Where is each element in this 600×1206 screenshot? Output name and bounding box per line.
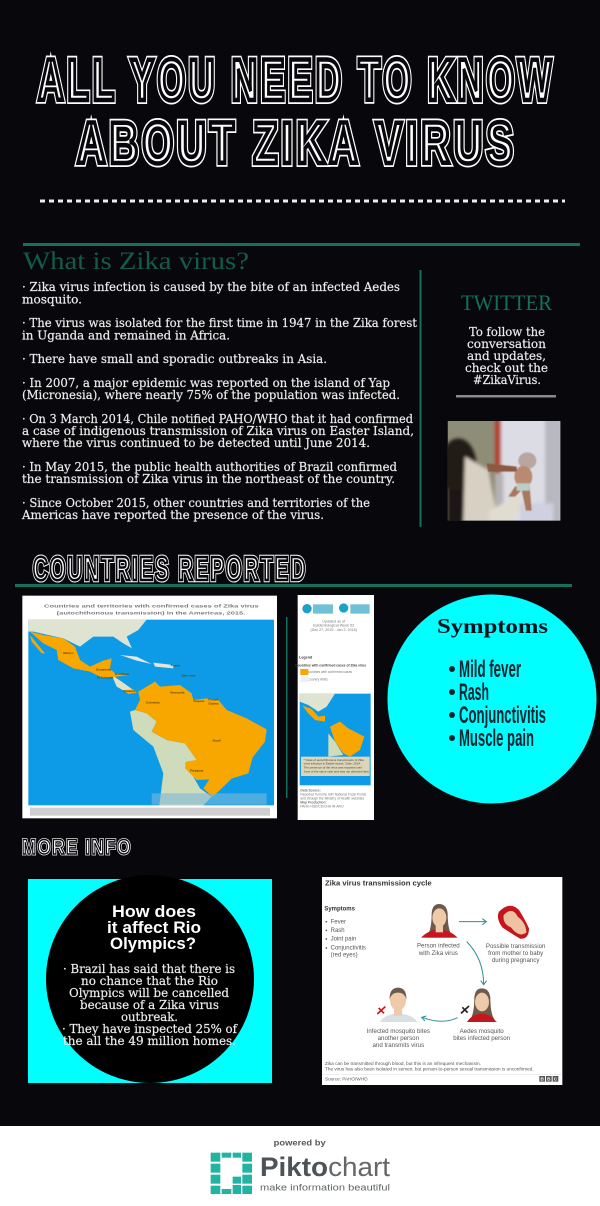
text block: what is Zika virus: where the virus continued to be detected until June 2014.: [22, 435, 370, 450]
diagram labels: during pregnancy: [492, 957, 540, 964]
diagram labels: bites infected person: [453, 1035, 511, 1042]
rio heading: [107, 902, 201, 953]
map labels: Guatemala: [96, 668, 112, 672]
map labels: Guyana: [193, 699, 205, 703]
rio text: Olympics will be cancelled: [69, 985, 229, 1000]
rio text: because of a Zika virus: [80, 997, 219, 1012]
heading: more info: MORE INFO: [22, 836, 132, 859]
heading: twitter: TWITTER: [461, 290, 552, 315]
diagram footnote: Source: PAHO/WHO: [325, 1077, 369, 1082]
text block: twitter: #ZikaVirus.: [473, 372, 541, 387]
map labels: Puerto: [171, 664, 180, 668]
diagram labels: another person: [378, 1035, 420, 1042]
rio heading: it affect Rio: [107, 918, 201, 937]
heading: what is Zika virus: What is Zika virus?: [23, 248, 249, 275]
legend text: Epidemiological Week 52: [313, 624, 354, 628]
diagram footnote: The virus has also been isolated in semen, but person-to-person sexual transmission is unconfirmed.: [325, 1066, 534, 1071]
map title: (autochthonous transmission) in the Americas, 2015.: [57, 611, 246, 617]
rio text: · They have inspected 25% of: [62, 1021, 238, 1036]
text block: what is Zika virus: · In 2007, a major epidemic was reported on the island of Yap: [22, 375, 390, 390]
map labels: Paraguay: [190, 769, 204, 773]
diagram symptoms: Rash: [331, 928, 345, 934]
heading: more info: MORE INFO: [22, 836, 132, 859]
text block: what is Zika virus: · In May 2015, the public health authorities of Brazil confirmed: [22, 459, 397, 474]
map labels: Mexico: [63, 651, 74, 655]
text block: twitter: To follow the: [469, 324, 545, 339]
map labels: Barbados: [182, 674, 196, 678]
diagram symptoms: Joint pain: [331, 937, 356, 943]
map legend panel: Map Production:: [300, 801, 327, 805]
map labels: Panama: [123, 689, 135, 693]
diagram labels: Possible transmission: [486, 943, 546, 950]
text block: what is Zika virus: (Micronesia), where nearly 75% of the population was infected.: [22, 387, 400, 402]
map labels: Venezuela: [170, 691, 185, 695]
map labels: Honduras: [115, 672, 129, 676]
BBC logo: B: [540, 1077, 544, 1082]
map legend panel: June of the same year and was not detected later.: [304, 770, 370, 774]
photo: baby with microcephaly: [448, 421, 560, 521]
symptoms list: Muscle pain: [459, 725, 534, 752]
title: [38, 48, 555, 176]
infected woman with mosquito: [461, 988, 497, 1022]
BBC logo: B: [547, 1077, 551, 1082]
text block: what is Zika virus: the transmission of Zika virus in the northeast of the country.: [22, 471, 395, 486]
rio heading: How does: [112, 902, 196, 921]
text block: twitter: [465, 324, 548, 387]
fetus in womb: [498, 906, 529, 939]
symptoms list: Mild fever: [459, 656, 521, 683]
heading: countries reported: COUNTRIES REPORTED: [33, 550, 307, 587]
diagram labels: with Zika virus: [418, 950, 458, 957]
diagram footnote: [325, 1061, 534, 1082]
South America: [135, 682, 267, 797]
rio text: · Brazil has said that there is: [63, 961, 235, 976]
diagram symptoms: (red eyes): [331, 953, 358, 959]
text block: what is Zika virus: Americas have reported the presence of the virus.: [21, 507, 324, 522]
text block: what is Zika virus: · There have small and sporadic outbreaks in Asia.: [22, 351, 327, 366]
legend text: Countries with confirmed cases: [306, 670, 352, 674]
symptoms heading: Symptoms: [437, 614, 548, 638]
map legend panel: The presence of the virus was reported until: [304, 766, 362, 770]
rio text: the all the 49 million homes.: [63, 1033, 236, 1048]
heading: countries reported: [33, 550, 307, 587]
legend text: Updated as of: [322, 619, 346, 623]
diagram symptoms: Conjunctivitis: [331, 946, 366, 952]
map legend panel: virus infection in Easter Island, Chile, 2014.: [304, 762, 361, 766]
map: countries with confirmed cases: [22, 596, 277, 818]
diagram footnote: Zika can be transmitted through blood, but this is an infrequent mechanism.: [325, 1061, 481, 1066]
tagline: make information beautiful: [260, 1183, 390, 1193]
rio text: [62, 961, 238, 1048]
diagram symptoms: Symptoms: [324, 907, 356, 913]
map labels: Colombia: [146, 701, 160, 705]
powered by: powered by: [274, 1137, 326, 1147]
BBC logo: [539, 1076, 558, 1082]
map legend panel: * Case of autochthonous transmission of Zika: [304, 758, 364, 762]
map labels: Guiana: [208, 701, 219, 705]
text block: what is Zika virus: mosquito.: [22, 291, 82, 306]
map labels: Brazil: [213, 739, 221, 743]
rio text: outbreak.: [121, 1009, 178, 1024]
footer: piktochart: [0, 1126, 600, 1206]
text block: what is Zika virus: in Uganda and remained in Africa.: [22, 327, 230, 342]
map labels: French: [208, 697, 218, 701]
symptoms list: Rash: [459, 679, 489, 706]
diagram labels: [367, 943, 546, 1049]
diagram labels: Aedes mosquito: [460, 1028, 504, 1035]
arrow to baby: [459, 919, 486, 925]
text block: what is Zika virus: [21, 279, 417, 522]
text block: what is Zika virus: · On 3 March 2014, Chile notified PAHO/WHO that it had confirmed: [22, 411, 413, 426]
diagram symptoms: [324, 907, 366, 959]
logos: [302, 603, 370, 614]
legend text: (Dec 27, 2015 - Jan 2, 2016): [310, 628, 357, 632]
map legend panel: PAHO HSD/CD/CHA IR-ARO: [300, 805, 344, 809]
map title: [44, 604, 259, 617]
man with mosquito: [377, 988, 418, 1022]
diagram labels: Person infected: [417, 943, 460, 950]
infected woman: [421, 904, 458, 938]
text block: twitter: conversation: [467, 336, 546, 351]
arrow to mosquito: [467, 942, 487, 985]
diagram labels: Infected mosquito bites: [367, 1028, 430, 1035]
map labels: [63, 651, 221, 773]
arrow to man: [422, 1016, 458, 1021]
diagram title: Zika virus transmission cycle: [325, 881, 432, 888]
panel: symptoms: [388, 594, 596, 804]
map legend panel: and through the Ministry of Health websites: [300, 797, 364, 801]
legend text: Country limits: [308, 678, 328, 682]
map title: Countries and territories with confirmed cases of Zika virus: [44, 604, 259, 610]
map legend panel: Data Source:: [300, 789, 321, 793]
panel: rio olympics: [28, 875, 272, 1083]
Mexico and Central America: [30, 632, 128, 678]
wordmark: Piktochart: [260, 1152, 391, 1182]
rio heading: Olympics?: [110, 934, 196, 953]
text block: twitter: and updates,: [467, 348, 546, 363]
text block: what is Zika virus: · Since October 2015, other countries and territories of the: [22, 495, 370, 510]
text block: what is Zika virus: a case of indigenous transmission of Zika virus on Easter Island,: [22, 423, 414, 438]
rio text: no chance that the Rio: [81, 973, 218, 988]
text block: twitter: check out the: [465, 360, 548, 375]
heading: countries reported: COUNTRIES REPORTED: [33, 550, 307, 587]
map legend panel: [295, 595, 374, 820]
text block: what is Zika virus: · Zika virus infection is caused by the bite of an infected Aedes: [22, 279, 400, 294]
legend text: Legend: [299, 656, 312, 660]
diagram labels: from mother to baby: [488, 950, 544, 957]
map labels: El Salvador: [97, 676, 114, 680]
diagram labels: and transmits virus: [372, 1042, 424, 1049]
BBC logo: C: [554, 1077, 558, 1082]
text block: what is Zika virus: · The virus was isolated for the first time in 1947 in the Zika forest: [22, 315, 417, 330]
legend text: [295, 619, 366, 682]
diagram symptoms: Fever: [331, 919, 346, 925]
legend text: Countries with confirmed cases of Zika virus: [295, 664, 366, 668]
symptoms list: [449, 656, 546, 752]
diagram: transmission cycle: [322, 877, 562, 1085]
logo mark: [211, 1153, 252, 1194]
map legend panel: Reported from the IHR National Focal Points: [300, 793, 367, 797]
map footnote: [30, 808, 270, 816]
